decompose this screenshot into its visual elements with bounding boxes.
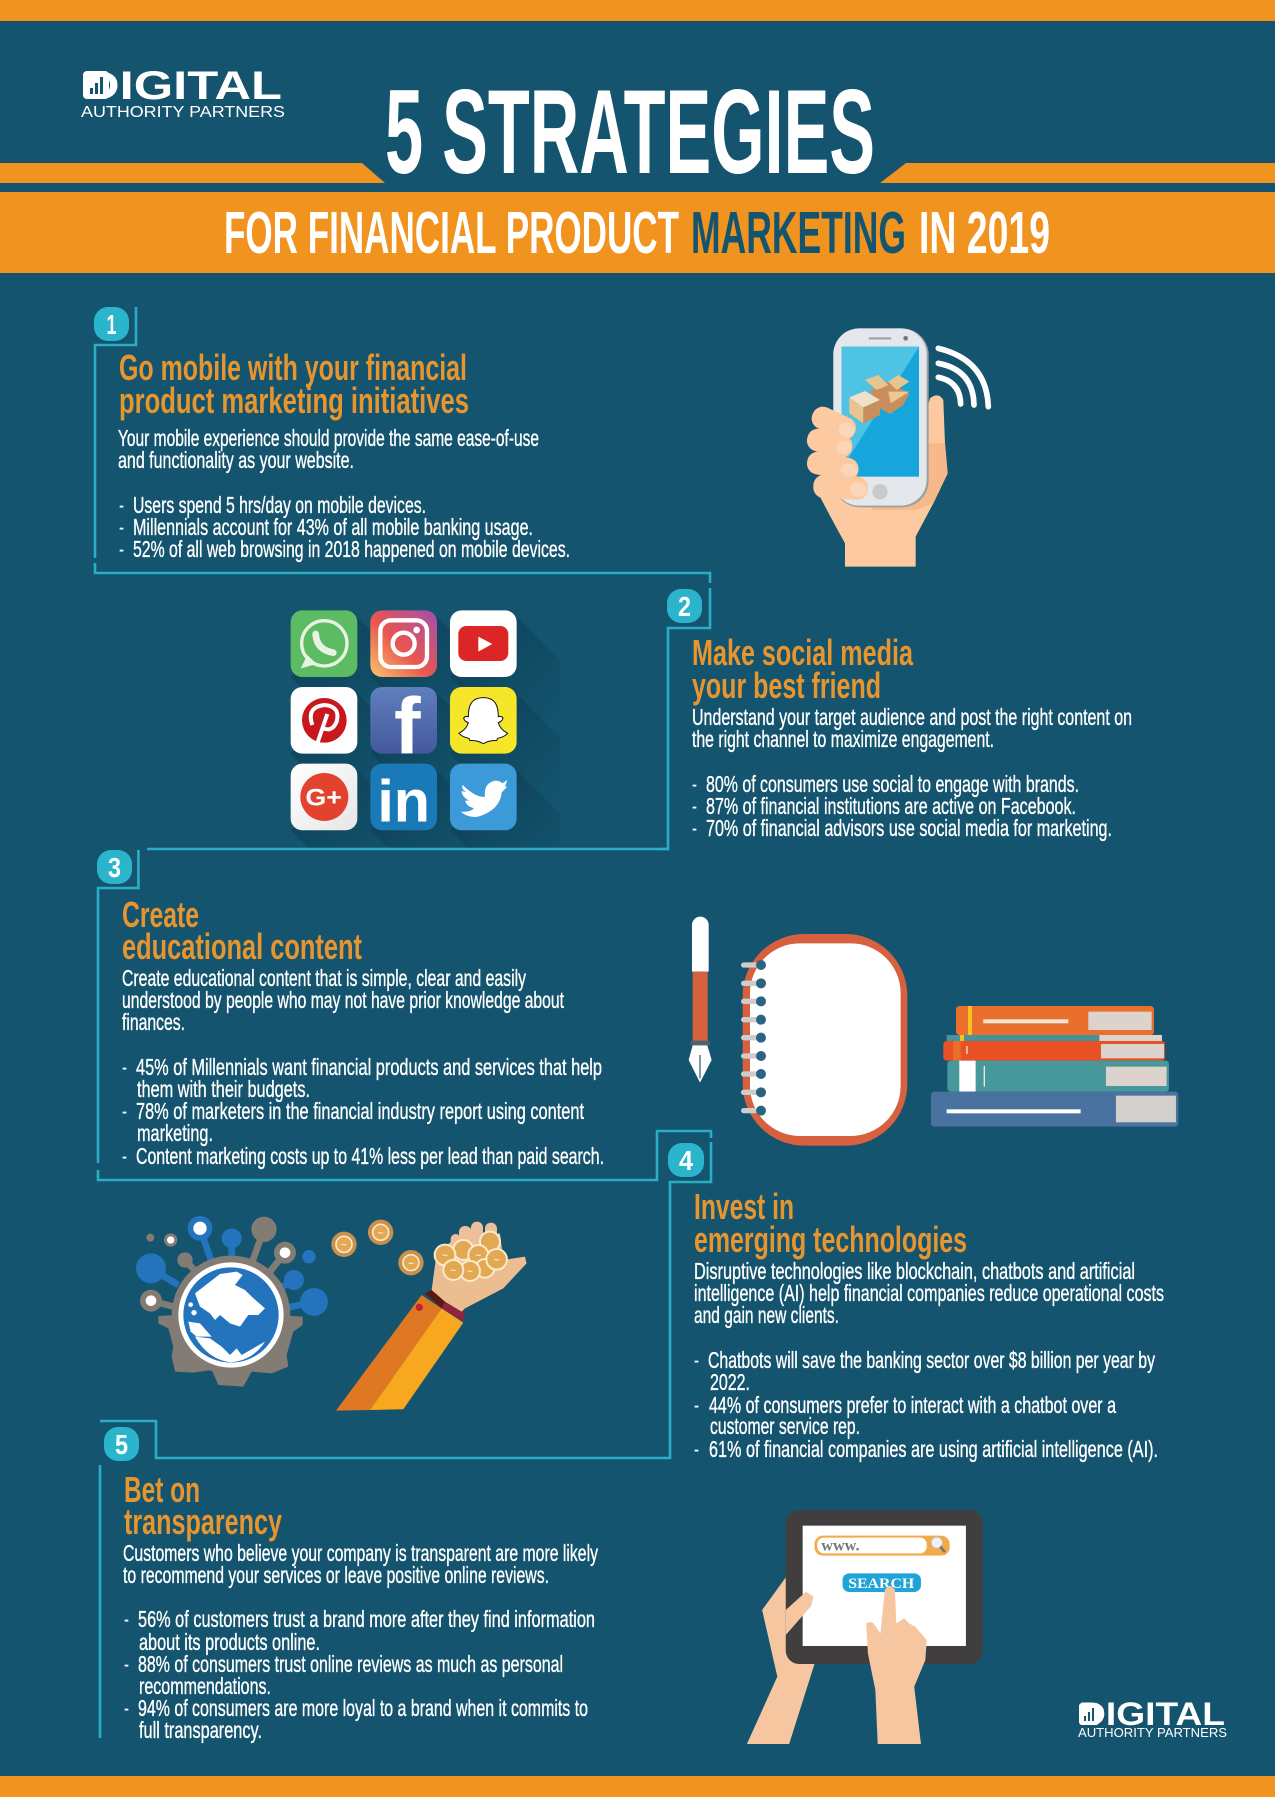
icon: coins [333, 1222, 507, 1281]
connector lines between sections [95, 307, 711, 1738]
bullet list 5: - [124, 1651, 129, 1677]
icon: coins: ~ [494, 1255, 500, 1266]
panel: strategy 1 [94, 307, 570, 562]
subtitle: IN 2019 [919, 200, 1050, 266]
badge 5: 5 [115, 1429, 128, 1460]
intro text 1 [118, 425, 539, 473]
bullet list 2: - [692, 815, 697, 841]
subtitle: MARKETING [691, 200, 906, 266]
bullet list 1: - [119, 492, 124, 518]
icon: coins: ~ [341, 1240, 347, 1251]
logo: Digital Authority Partners (top) [81, 64, 285, 121]
bullet list 4: 2022. [710, 1369, 750, 1395]
bullet list 3 [122, 1054, 604, 1169]
icon grid: social media icons [290, 610, 552, 847]
bullet list 2: - [692, 793, 697, 819]
icon: stack of books [931, 1006, 1178, 1127]
bullet list 2: 70% of financial advisors use social media for marketing. [706, 815, 1112, 841]
icon: Facebook: f [394, 682, 421, 771]
icon: coins: ~ [467, 1267, 473, 1278]
bullet list 3: - [122, 1054, 127, 1080]
logo: Digital Authority Partners (top): AUTHORITY PARTNERS [81, 104, 285, 121]
bullet list 4: 44% of consumers prefer to interact with a chatbot over a [709, 1392, 1116, 1418]
bullet list 3: Content marketing costs up to 41% less per lead than paid search. [136, 1143, 604, 1169]
bullet list 3: - [122, 1098, 127, 1124]
heading 5: Bet on [124, 1469, 200, 1510]
icon: hands using tablet: SEARCH [848, 1576, 915, 1592]
bullet list 3: them with their budgets. [137, 1076, 310, 1102]
bullet list 2 [692, 771, 1112, 841]
intro text 3: Create educational content that is simple, clear and easily [122, 965, 526, 991]
logo: Digital Authority Partners (bottom) [1078, 1696, 1227, 1740]
badge 2: 2 [678, 591, 691, 622]
intro text 3 [122, 965, 564, 1035]
intro text 5: Customers who believe your company is transparent are more likely [123, 1540, 598, 1566]
bullet list 3: 45% of Millennials want financial products and services that help [136, 1054, 602, 1080]
icon: YouTube [450, 610, 517, 677]
logo: Digital Authority Partners (top): DIGITAL [83, 64, 282, 108]
icon: Twitter [450, 764, 517, 830]
icon: pen, notebook and books [689, 917, 1178, 1146]
heading 1: product marketing initiatives [119, 380, 469, 421]
heading 3 [122, 894, 362, 967]
bullet list 1: Users spend 5 hrs/day on mobile devices. [133, 492, 426, 518]
bullet list 2: 80% of consumers use social to engage with brands. [706, 771, 1079, 797]
heading 1 [119, 347, 469, 421]
intro text 2 [692, 704, 1132, 752]
badge 1 [94, 307, 129, 341]
panel: strategy 5 [104, 1427, 598, 1743]
heading 5 [124, 1469, 282, 1542]
bullet list 3: marketing. [137, 1120, 213, 1146]
icon: globe gear, coins and hand [136, 1216, 527, 1411]
bullet list 4: - [694, 1347, 699, 1373]
bullet list 5 [124, 1606, 595, 1743]
right header stripe [880, 163, 1275, 183]
intro text 3: finances. [122, 1009, 185, 1035]
bullet list 4: - [694, 1392, 699, 1418]
bullet list 5: 88% of consumers trust online reviews as much as personal [138, 1651, 563, 1677]
icon: Facebook [370, 682, 437, 771]
bullet list 2: 87% of financial institutions are active on Facebook. [706, 793, 1076, 819]
icon: hand holding phone [805, 328, 988, 567]
bullet list 1: - [119, 536, 124, 562]
icon: globe in gear with nodes [136, 1216, 328, 1387]
icon: coins: ~ [450, 1266, 456, 1277]
icon: spiral notebook [741, 934, 907, 1146]
bullet list 4: customer service rep. [710, 1413, 860, 1439]
icon: coins: ~ [475, 1251, 481, 1262]
icon: WhatsApp [291, 610, 357, 677]
logo: Digital Authority Partners (bottom): DIGITAL [1079, 1696, 1225, 1732]
subtitle: FOR FINANCIAL PRODUCT [224, 200, 679, 266]
badge 4 [668, 1143, 704, 1177]
intro text 1: and functionality as your website. [118, 447, 354, 473]
icon: coins: ~ [378, 1228, 384, 1239]
intro text 5: to recommend your services or leave positive online reviews. [123, 1562, 549, 1588]
bullet list 5: about its products online. [139, 1629, 320, 1655]
intro text 4 [694, 1258, 1164, 1328]
top orange bar [0, 0, 1275, 21]
icon: Instagram [370, 610, 437, 677]
icon: hands using tablet: www. [821, 1538, 860, 1555]
intro text 3: understood by people who may not have prior knowledge about [122, 987, 564, 1013]
badge 3: 3 [108, 852, 121, 883]
panel: strategy 4 [668, 1143, 1164, 1462]
icon: Google Plus: G+ [305, 784, 342, 811]
icon: LinkedIn: in [377, 768, 430, 835]
badge 4: 4 [679, 1145, 693, 1176]
heading 4: emerging technologies [694, 1219, 967, 1260]
heading 3: educational content [122, 926, 362, 967]
intro text 2: the right channel to maximize engagement. [692, 726, 994, 752]
icon: coins: ~ [442, 1251, 448, 1262]
subtitle band [0, 192, 1275, 273]
panel: strategy 3 [97, 850, 604, 1169]
bullet list 4: - [694, 1436, 699, 1462]
heading 4 [694, 1186, 967, 1260]
bullet list 1: 52% of all web browsing in 2018 happened on mobile devices. [133, 536, 570, 562]
bullet list 2: - [692, 771, 697, 797]
heading 4: Invest in [694, 1186, 794, 1227]
bullet list 1: - [119, 514, 124, 540]
bottom orange bar [0, 1776, 1275, 1797]
icon: Google Plus [291, 764, 357, 830]
icon: arm with coin-filled hand [336, 1222, 527, 1411]
title: 5 STRATEGIES [385, 65, 875, 199]
bullet list 3: - [122, 1143, 127, 1169]
badge 2 [667, 589, 702, 623]
bullet list 4 [694, 1347, 1158, 1462]
bullet list 3: 78% of marketers in the financial industry report using content [136, 1098, 584, 1124]
icon: hands using tablet [747, 1510, 983, 1744]
panel: strategy 2 [667, 589, 1132, 841]
bullet list 5: recommendations. [139, 1673, 271, 1699]
bullet list 5: 94% of consumers are more loyal to a brand when it commits to [138, 1695, 588, 1721]
heading 1: Go mobile with your financial [119, 347, 467, 388]
icon: Snapchat [450, 687, 517, 754]
intro text 4: and gain new clients. [694, 1302, 839, 1328]
bullet list 5: full transparency. [139, 1717, 262, 1743]
logo: Digital Authority Partners (bottom): AUTHORITY PARTNERS [1078, 1725, 1227, 1740]
bullet list 1 [119, 492, 570, 562]
long shadows [291, 617, 552, 847]
heading 2 [692, 632, 914, 706]
bullet list 5: 56% of customers trust a brand more after they find information [138, 1606, 595, 1632]
icon: coins: ~ [408, 1258, 414, 1269]
badge 3 [97, 850, 132, 884]
badge 5 [104, 1427, 139, 1461]
icon: fountain pen [689, 917, 712, 1083]
bullet list 5: - [124, 1695, 129, 1721]
heading 2: your best friend [692, 665, 881, 706]
heading 3: Create [122, 894, 199, 935]
badge 1: 1 [106, 309, 116, 340]
heading 5: transparency [124, 1501, 282, 1542]
intro text 1: Your mobile experience should provide the same ease-of-use [118, 425, 539, 451]
left header stripe [0, 163, 385, 183]
icon: Pinterest [291, 687, 357, 754]
heading 2: Make social media [692, 632, 914, 673]
bullet list 5: - [124, 1606, 129, 1632]
intro text 5 [123, 1540, 598, 1588]
bullet list 1: Millennials account for 43% of all mobile banking usage. [133, 514, 533, 540]
